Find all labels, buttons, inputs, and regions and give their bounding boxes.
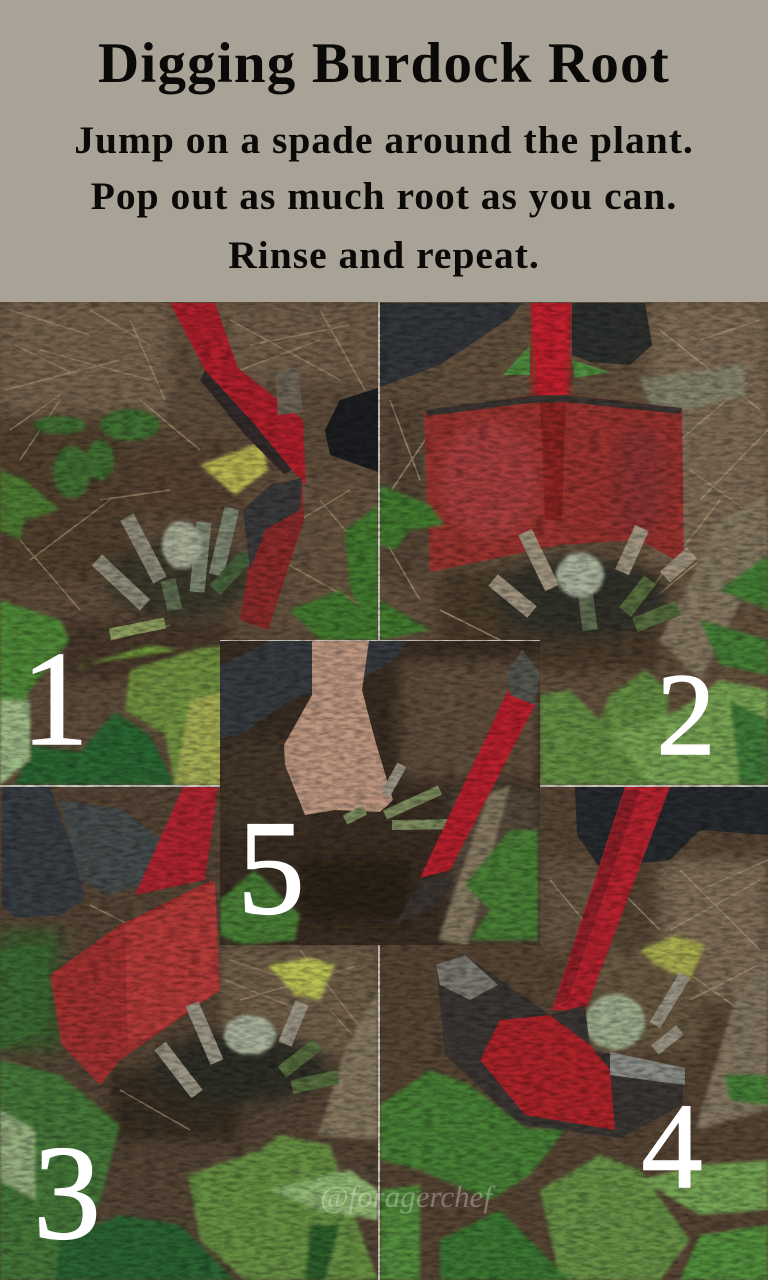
seedlings (220, 830, 538, 945)
pale leaf (268, 958, 335, 1000)
log (660, 495, 768, 680)
leaf far left (0, 470, 60, 540)
spade (424, 303, 684, 572)
spade (50, 787, 220, 1085)
panel: step 2 photo (380, 302, 768, 785)
big leaves (380, 1070, 768, 1280)
panel: step 3 photo (0, 787, 378, 1280)
panel: step 5 photo (220, 641, 540, 945)
spade (436, 787, 685, 1138)
burdock crown (152, 1000, 340, 1110)
panel: step 4 photo (380, 787, 768, 1280)
title: Digging Burdock Root (98, 32, 670, 95)
step number 5: 5 (237, 794, 305, 943)
pale leaf (200, 442, 268, 495)
spade (395, 650, 540, 925)
instruction line 2: Pop out as much root as you can. (91, 174, 677, 218)
panel: step 1 photo (0, 302, 380, 785)
leaf behind blade (503, 345, 610, 378)
boots (2, 787, 160, 918)
instruction line 1: Jump on a spade around the plant. (74, 118, 694, 162)
log (438, 785, 510, 945)
step number 2: 2 (656, 649, 716, 780)
step number 1: 1 (21, 625, 89, 774)
stone (640, 365, 745, 410)
big leaves (540, 555, 768, 785)
pulled burdock root (345, 765, 458, 825)
boot (325, 388, 378, 472)
burdock crown (97, 508, 250, 634)
boots (380, 303, 652, 387)
burdock crown (585, 975, 685, 1050)
central seedling (290, 505, 378, 640)
pale leaf (640, 935, 705, 980)
instruction line 3: Rinse and repeat. (228, 233, 540, 277)
step number 4: 4 (642, 1079, 702, 1214)
header panel (0, 0, 768, 302)
soil and foliage texture overlay (0, 302, 768, 1280)
leaf cluster upper left (34, 409, 160, 498)
burdock crown (493, 528, 692, 638)
central seedling (380, 485, 445, 640)
boots (220, 641, 408, 738)
big leaves (0, 945, 378, 1280)
big leaves bottom (0, 600, 225, 785)
spade (170, 303, 306, 630)
log (318, 990, 378, 1140)
log (695, 950, 768, 1130)
hand and arm (284, 641, 393, 815)
photo collage (0, 302, 768, 1280)
boots (575, 787, 768, 868)
watermark: @foragerchef (320, 1179, 496, 1214)
step number 3: 3 (33, 1119, 101, 1268)
